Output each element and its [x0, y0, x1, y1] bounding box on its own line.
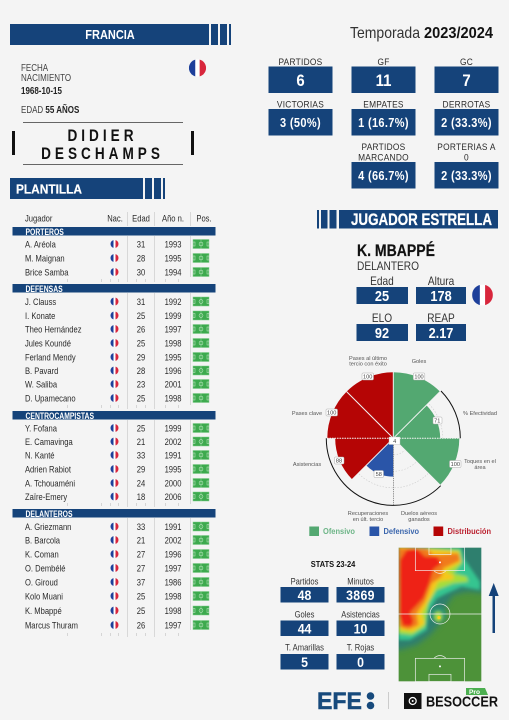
stat: GC: 7	[462, 72, 471, 90]
coach name: DESCHAMPS	[41, 145, 164, 163]
section: defensas: 1992	[165, 296, 182, 307]
icon: France flag coach	[189, 59, 206, 77]
section: delanteros: 1997	[165, 620, 182, 631]
section: delanteros: 2002	[165, 535, 182, 546]
section: centrocampistas: 2000	[165, 478, 182, 489]
stat: minutos: 3869	[346, 587, 375, 603]
section: centrocampistas: 21	[137, 436, 145, 447]
stat: partidos	[268, 57, 332, 93]
section: defensas: J. Clauss	[25, 296, 56, 307]
section: centrocampistas: 25	[137, 423, 145, 434]
value labels: 100	[414, 374, 424, 380]
stat: asistencias: Asistencias	[341, 609, 380, 620]
axis labels: Goles	[412, 359, 427, 365]
axis labels: ganados	[408, 517, 430, 523]
section: centrocampistas: 18	[137, 491, 145, 502]
stat: edad: Edad	[370, 275, 394, 288]
stat: victorias: 3 (50%)	[280, 116, 321, 130]
stat: goles: Goles	[295, 609, 314, 620]
panel: team stats	[268, 57, 498, 188]
section: delanteros: 26	[137, 620, 145, 631]
section: centrocampistas: 1999	[165, 423, 182, 434]
section: delanteros: 1991	[165, 521, 182, 532]
stat: altura	[416, 275, 466, 304]
section: defensas: 29	[137, 352, 145, 363]
section: delanteros: 1998	[165, 591, 182, 602]
section: porteros: 30	[137, 267, 145, 278]
section: porteros: M. Maignan	[25, 253, 65, 264]
stat: altura: Altura	[428, 275, 455, 288]
value labels: 100	[327, 410, 336, 416]
section: centrocampistas: 1991	[165, 450, 182, 461]
stat: porterias a 0: PORTERIAS A	[437, 142, 496, 152]
stat: minutos: Minutos	[347, 576, 374, 587]
stat: GC	[434, 57, 498, 93]
sectors	[393, 372, 440, 438]
section: porteros: 1995	[165, 253, 182, 264]
section: delanteros: 1997	[165, 563, 182, 574]
section: defensas: Jules Koundé	[25, 338, 71, 349]
stat: partidos: Partidos	[291, 576, 318, 587]
section: centrocampistas: 33	[137, 450, 145, 461]
stat: amarillas: 5	[301, 654, 308, 670]
stat: partidos marcando	[352, 142, 416, 188]
text: coach birth date and age: EDAD 55 AÑOS	[21, 104, 79, 115]
axis labels: área	[474, 465, 486, 471]
separators	[327, 372, 460, 485]
section: defensas: 28	[137, 365, 145, 376]
axis labels: Pases al último	[349, 356, 387, 362]
section: centrocampistas: E. Camavinga	[25, 436, 73, 447]
text: star player name: K. MBAPPÉ	[357, 241, 435, 260]
stat: altura: 178	[430, 288, 452, 304]
section: centrocampistas: CENTROCAMPISTAS	[26, 411, 94, 421]
section: centrocampistas: 29	[137, 464, 145, 475]
section: porteros: 28	[137, 253, 145, 264]
chart: polar radar	[292, 356, 497, 523]
text: coach birth date and age: 1968-10-15	[21, 85, 62, 96]
stat: goles	[280, 609, 328, 637]
stat: minutos	[336, 576, 384, 603]
table header: Año n.	[162, 213, 184, 224]
section: delanteros: 1986	[165, 577, 182, 588]
text: coach birth date and age: FECHA	[21, 62, 49, 73]
stat: amarillas: T. Amarillas	[285, 642, 324, 653]
axis labels: en últ. tercio	[353, 517, 383, 523]
heading: season: 2023/2024	[424, 25, 493, 42]
axis labels: tercio con éxito	[349, 362, 387, 368]
stat: edad	[356, 275, 408, 304]
text: star player name: DELANTERO	[357, 261, 419, 273]
section: porteros: PORTEROS	[26, 227, 64, 237]
legend: Distribución	[448, 527, 491, 536]
section: delanteros: 1998	[165, 605, 182, 616]
section: delanteros: 33	[137, 521, 145, 532]
section: delanteros: Kolo Muani	[25, 591, 63, 602]
outer arcs	[441, 391, 460, 438]
section: delanteros: 21	[137, 535, 145, 546]
chart: heatmap	[398, 548, 482, 682]
section: defensas: 25	[137, 310, 145, 321]
section: delanteros: O. Giroud	[25, 577, 58, 588]
coach name	[12, 122, 194, 165]
section: centrocampistas: N. Kanté	[25, 450, 55, 461]
heading: season	[350, 25, 493, 42]
stat: REAP: REAP	[427, 312, 455, 325]
value labels: 100	[451, 462, 460, 468]
stat: partidos: 48	[298, 587, 311, 603]
legend: Ofensivo	[323, 527, 355, 536]
table header: Nac.	[107, 213, 123, 224]
stat: partidos marcando: MARCANDO	[358, 152, 409, 163]
section: porteros: 1993	[165, 239, 182, 250]
section: porteros: 31	[137, 239, 145, 250]
panel: season stats	[280, 560, 384, 670]
section: delanteros: 27	[137, 563, 145, 574]
section: centrocampistas: 2006	[165, 491, 182, 502]
section: delanteros: K. Mbappé	[25, 605, 62, 616]
logo: BeSoccer Pro: BESOCCER	[426, 694, 498, 710]
section: defensas: 1999	[165, 310, 182, 321]
section: porteros: Brice Samba	[25, 267, 69, 278]
section: defensas: 2001	[165, 379, 182, 390]
section: centrocampistas: Y. Fofana	[25, 423, 57, 434]
axis labels: Pases clave	[292, 411, 322, 417]
section: centrocampistas: 24	[137, 478, 145, 489]
legend: Defensivo	[384, 527, 419, 536]
stat: porterias a 0: 0	[464, 152, 469, 163]
section: defensas: D. Upamecano	[25, 393, 76, 404]
icon: France flag star player	[472, 285, 493, 305]
logo: EFE: EFE	[317, 688, 362, 715]
section: defensas: 1995	[165, 352, 182, 363]
section: porteros	[12, 227, 216, 278]
section: defensas: W. Saliba	[25, 379, 57, 390]
section: delanteros: 1996	[165, 549, 182, 560]
section: defensas: 1998	[165, 338, 182, 349]
stat: partidos	[280, 576, 328, 603]
value labels: 88	[336, 458, 342, 464]
table header	[25, 212, 212, 226]
section: defensas: 25	[137, 338, 145, 349]
section: defensas	[12, 284, 216, 404]
heading: Plantilla banner	[10, 178, 165, 199]
section: defensas: B. Pavard	[25, 365, 59, 376]
section: centrocampistas: A. Tchouaméni	[25, 478, 75, 489]
table header: Pos.	[196, 213, 212, 224]
section: delanteros: A. Griezmann	[25, 521, 72, 532]
section: delanteros: 27	[137, 549, 145, 560]
section: centrocampistas: Zaïre-Emery	[25, 491, 68, 502]
stat: victorias	[268, 99, 332, 136]
section: defensas: 1997	[165, 324, 182, 335]
text: coach birth date and age	[21, 62, 79, 115]
stat: partidos marcando: 4 (66.7%)	[358, 169, 409, 183]
panel: star player stats	[356, 275, 466, 341]
heading: Plantilla banner: PLANTILLA	[16, 182, 83, 196]
stat: GF: 11	[376, 72, 391, 90]
heading: Francia banner	[10, 24, 231, 45]
stat: ELO: 92	[375, 325, 389, 341]
section: delanteros: 37	[137, 577, 145, 588]
section: delanteros	[12, 509, 216, 631]
section: delanteros: O. Dembélé	[25, 563, 66, 574]
value labels	[326, 373, 461, 478]
arrow: attack direction	[489, 583, 499, 633]
section: delanteros: 25	[137, 605, 145, 616]
rings	[344, 389, 443, 488]
section: defensas: DEFENSAS	[26, 284, 63, 294]
stat: REAP: 2.17	[429, 325, 453, 341]
section: defensas: 31	[137, 296, 145, 307]
value labels: 58	[376, 472, 382, 478]
section: defensas: 1998	[165, 393, 182, 404]
section: delanteros: DELANTEROS	[26, 509, 73, 519]
section: centrocampistas	[12, 411, 216, 502]
heading: Francia banner: FRANCIA	[85, 28, 135, 42]
section: defensas: Ferland Mendy	[25, 352, 76, 363]
stat: edad: 25	[375, 288, 389, 304]
value labels: 4	[393, 439, 396, 445]
logo: BeSoccer Pro: Pro	[469, 690, 480, 696]
stat: partidos marcando: PARTIDOS	[361, 142, 406, 152]
legend	[309, 526, 491, 536]
axis labels: Recuperaciones	[348, 511, 388, 517]
section: delanteros: K. Coman	[25, 549, 59, 560]
section: defensas: 1996	[165, 365, 182, 376]
stat: rojas	[336, 642, 384, 670]
stat: derrotas	[434, 99, 498, 136]
stat: empates: 1 (16.7%)	[358, 116, 409, 130]
stat: derrotas: 2 (33.3%)	[441, 116, 492, 130]
section: centrocampistas: 1995	[165, 464, 182, 475]
text: star player name	[357, 241, 435, 273]
table header: Jugador	[25, 213, 53, 224]
section: porteros: 1994	[165, 267, 182, 278]
heading: stats 23-24: STATS 23-24	[311, 560, 356, 569]
section: centrocampistas: Adrien Rabiot	[25, 464, 72, 475]
section: delanteros: Marcus Thuram	[25, 620, 78, 631]
stat: GF	[352, 57, 416, 93]
stat: derrotas: DERROTAS	[443, 99, 490, 110]
table header: Edad	[132, 213, 150, 224]
stat: goles: 44	[298, 621, 312, 637]
heading: season: Temporada	[350, 25, 420, 42]
stat: porterias a 0: 2 (33.3%)	[441, 169, 492, 183]
stat: porterias a 0	[434, 142, 498, 188]
coach name: DIDIER	[67, 127, 138, 145]
section: defensas: Theo Hernández	[25, 324, 82, 335]
stat: rojas: 0	[357, 654, 364, 670]
stat: partidos: PARTIDOS	[278, 57, 323, 67]
value labels: 71	[434, 418, 440, 424]
section: defensas: 23	[137, 379, 145, 390]
section: porteros: A. Aréola	[25, 239, 56, 250]
stat: partidos: 6	[296, 72, 305, 90]
logo: BeSoccer Pro	[404, 688, 498, 710]
stat: amarillas	[280, 642, 328, 670]
stat: empates: EMPATES	[363, 99, 404, 110]
table: squad	[12, 212, 216, 637]
section: defensas: 25	[137, 393, 145, 404]
section: centrocampistas: 2002	[165, 436, 182, 447]
stat: victorias: VICTORIAS	[277, 99, 324, 110]
axis labels	[292, 356, 497, 523]
axis labels: % Efectividad	[463, 411, 497, 417]
text: coach birth date and age: NACIMIENTO	[21, 72, 71, 83]
stat: rojas: T. Rojas	[347, 642, 374, 653]
stat: REAP	[416, 312, 466, 341]
stat: GF: GF	[377, 57, 390, 67]
stat: ELO	[356, 312, 408, 341]
stat: ELO: ELO	[372, 312, 392, 325]
section: defensas: 26	[137, 324, 145, 335]
stat: GC: GC	[460, 57, 473, 67]
value labels: 100	[363, 374, 372, 380]
axis labels: Asistencias	[293, 462, 321, 468]
stat: asistencias: 10	[354, 621, 367, 637]
stat: asistencias	[336, 609, 384, 637]
stat: empates	[352, 99, 416, 136]
section: delanteros: B. Barcola	[25, 535, 60, 546]
axis labels: Toques en el	[464, 459, 496, 465]
section: defensas: I. Konate	[25, 310, 56, 321]
axis labels: Duelos aéreos	[401, 511, 437, 517]
section: delanteros: 25	[137, 591, 145, 602]
